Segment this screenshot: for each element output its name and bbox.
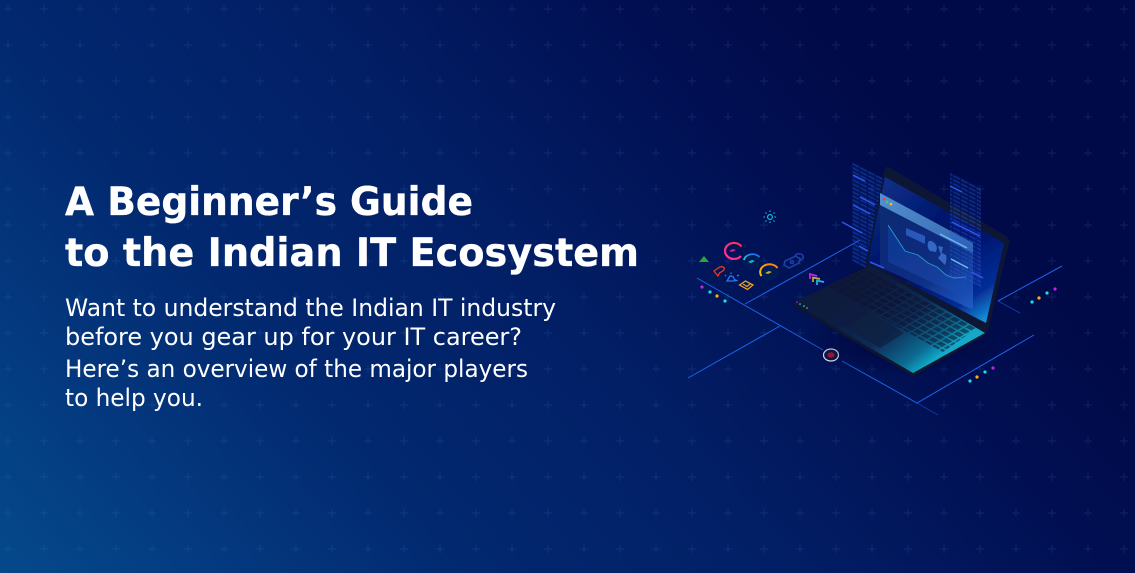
- pie chart: [928, 241, 946, 265]
- icon: pink gauge: [725, 243, 742, 259]
- circuit lines on the floor: [688, 240, 1062, 415]
- status dots: [700, 285, 1057, 383]
- icon: red tag: [714, 266, 724, 276]
- intro paragraph: Here’s an overview of the major players: [65, 355, 528, 383]
- line chart: [888, 225, 966, 298]
- intro paragraph: Want to understand the Indian IT industry: [65, 294, 556, 322]
- icon: chevrons: [810, 274, 824, 285]
- icon: blue bulb: [725, 272, 739, 281]
- window controls: [883, 198, 892, 205]
- data column left: [852, 162, 883, 275]
- intro paragraph: [65, 294, 556, 412]
- title: A Beginner’s Guide: [65, 180, 473, 225]
- trackpad: [833, 307, 904, 348]
- laptop screen: [865, 167, 1009, 333]
- laptop shadow: [800, 304, 1000, 376]
- icon: orange gauge: [759, 264, 779, 280]
- icon: blue gauge: [743, 254, 761, 268]
- icon: red badge: [824, 349, 838, 361]
- laptop base: [793, 265, 986, 377]
- glowing code highlights: [842, 175, 983, 278]
- intro paragraph: to help you.: [65, 384, 203, 412]
- base indicator lights: [796, 301, 808, 309]
- keyboard: [827, 267, 977, 352]
- icon: wifi: [699, 256, 709, 262]
- illustration: isometric laptop scene: [688, 162, 1062, 415]
- intro paragraph: before you gear up for your IT career?: [65, 323, 522, 351]
- text block: [906, 228, 925, 244]
- data column right: [950, 172, 981, 287]
- title: [65, 180, 639, 276]
- icon: mail: [740, 281, 753, 290]
- icon: sun: [764, 210, 776, 223]
- floating app window: [880, 193, 973, 309]
- icon: padlock: [784, 254, 803, 268]
- title: to the Indian IT Ecosystem: [65, 231, 639, 276]
